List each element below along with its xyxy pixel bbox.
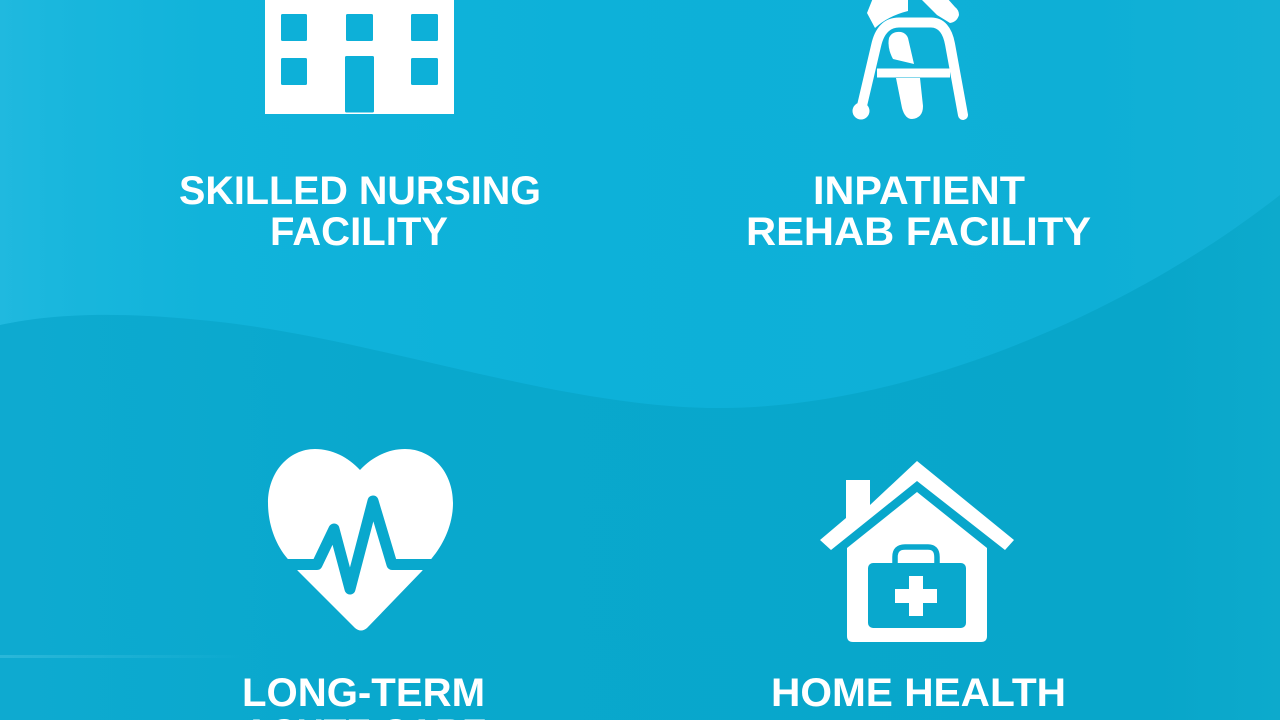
label: skilled nursing facility: FACILITY (270, 210, 448, 254)
label: inpatient rehab facility: INPATIENT (813, 169, 1025, 213)
label: home health: HOME HEALTH (771, 671, 1066, 715)
icon: walker (852, 0, 963, 120)
panel: long-term acute care (242, 449, 487, 720)
label: inpatient rehab facility (746, 169, 1091, 254)
panel: home health (771, 461, 1066, 715)
icon: heart with pulse (268, 449, 453, 630)
faint light streak (0, 655, 245, 658)
label: inpatient rehab facility: REHAB FACILITY (746, 210, 1091, 254)
icon: building (265, 0, 454, 114)
label: long-term acute care: LONG-TERM (242, 671, 485, 715)
panel: inpatient rehab facility (746, 0, 1091, 254)
label: skilled nursing facility (179, 169, 541, 254)
upper wave panel (0, 0, 1280, 408)
panel: skilled nursing facility (179, 0, 541, 254)
icon: house with medical bag (820, 461, 1014, 642)
label: skilled nursing facility: SKILLED NURSING (179, 169, 541, 213)
